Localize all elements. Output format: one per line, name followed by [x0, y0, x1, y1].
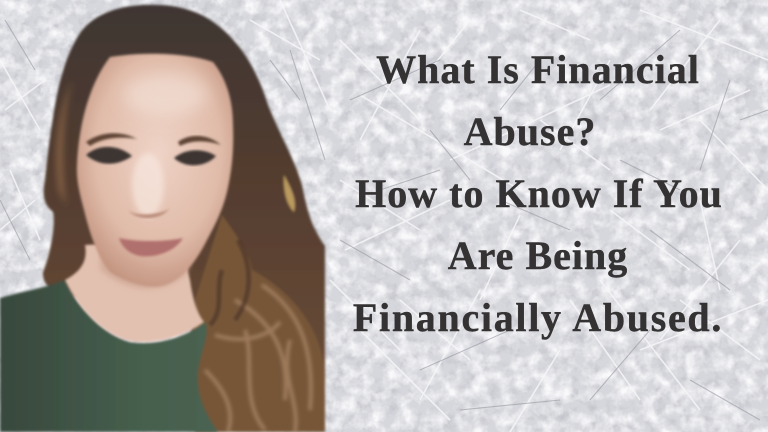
right eye — [174, 150, 216, 165]
mouth — [119, 238, 183, 256]
headline: How to Know If You — [355, 171, 723, 216]
headline: What Is Financial — [376, 47, 700, 92]
shirt — [0, 280, 218, 432]
right eyebrow — [178, 136, 221, 146]
headline: Financially Abused. — [353, 295, 723, 340]
forehead highlight — [123, 73, 207, 117]
left eyebrow — [86, 133, 137, 146]
nose — [128, 153, 170, 218]
face — [77, 54, 233, 287]
headline — [353, 47, 723, 340]
hair — [43, 5, 325, 432]
headline: Abuse? — [464, 109, 596, 154]
headline: Are Being — [448, 233, 628, 278]
left eye — [86, 147, 132, 164]
neck and chest — [65, 240, 204, 342]
